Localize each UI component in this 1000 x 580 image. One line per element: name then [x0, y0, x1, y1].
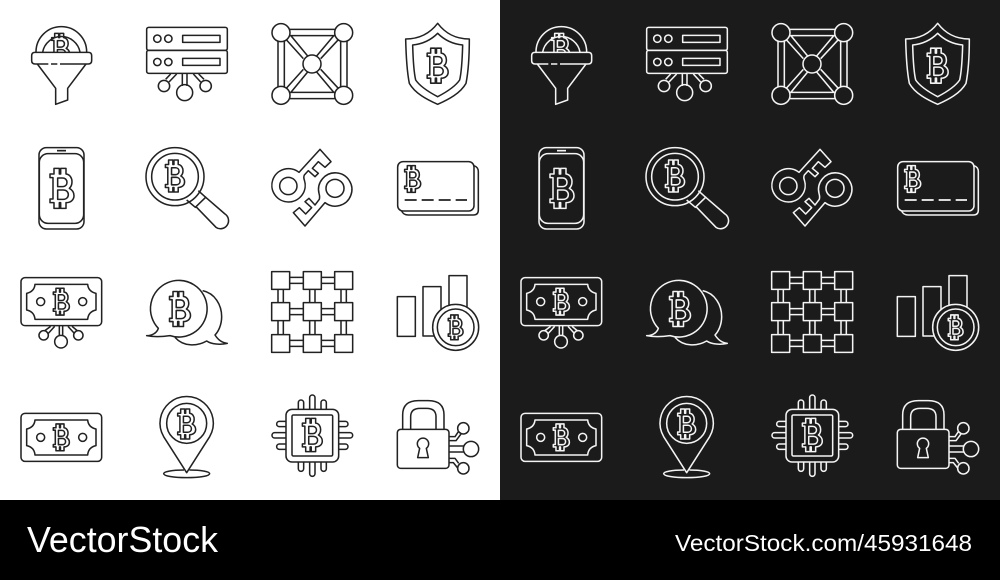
icon: bar chart with bitcoin coin — [397, 276, 479, 350]
icon: bitcoin processor chip — [772, 395, 853, 476]
icon: bitcoin location pin — [160, 397, 213, 478]
panel: light icon set — [0, 0, 500, 500]
icon: server with network nodes — [647, 27, 727, 101]
icon: bitcoin magnifier — [146, 148, 229, 229]
panel: dark icon set — [500, 0, 1000, 500]
icon: server with network nodes — [147, 27, 227, 101]
icon: bitcoin chat bubbles — [647, 280, 727, 345]
icon: bitcoin shield — [906, 23, 969, 104]
icon: bar chart with bitcoin coin — [897, 276, 979, 350]
icon: bitcoin location pin — [660, 397, 713, 478]
icon: crossed keys — [772, 149, 852, 226]
icon: bitcoin smartphone — [539, 148, 584, 229]
icon: blockchain node network — [272, 24, 353, 104]
icon: crossed keys — [272, 149, 352, 226]
icon: bitcoin smartphone — [39, 148, 84, 229]
icon: bitcoin processor chip — [272, 395, 353, 476]
icon: bitcoin banknote — [521, 413, 602, 461]
footer bar — [0, 500, 1000, 580]
icon: blockchain grid — [272, 272, 353, 352]
icon: bitcoin chat bubbles — [147, 280, 227, 345]
icon: bitcoin magnifier — [646, 148, 729, 229]
icon: padlock with circuit nodes — [897, 401, 979, 474]
icon: bitcoin cards — [398, 162, 478, 215]
icon: bitcoin funnel — [32, 27, 92, 104]
icon: blockchain node network — [772, 24, 853, 104]
icon: bitcoin funnel — [532, 27, 592, 104]
icon: bitcoin shield — [406, 23, 469, 104]
icon: banknote with network nodes — [521, 278, 602, 348]
icon: padlock with circuit nodes — [397, 401, 479, 474]
icon: blockchain grid — [772, 272, 853, 352]
icon: banknote with network nodes — [21, 278, 102, 348]
brand name: VectorStock — [27, 519, 219, 560]
image reference url: VectorStock.com/45931648 — [675, 530, 972, 556]
icon: bitcoin banknote — [21, 413, 102, 461]
icon: bitcoin cards — [898, 162, 978, 215]
